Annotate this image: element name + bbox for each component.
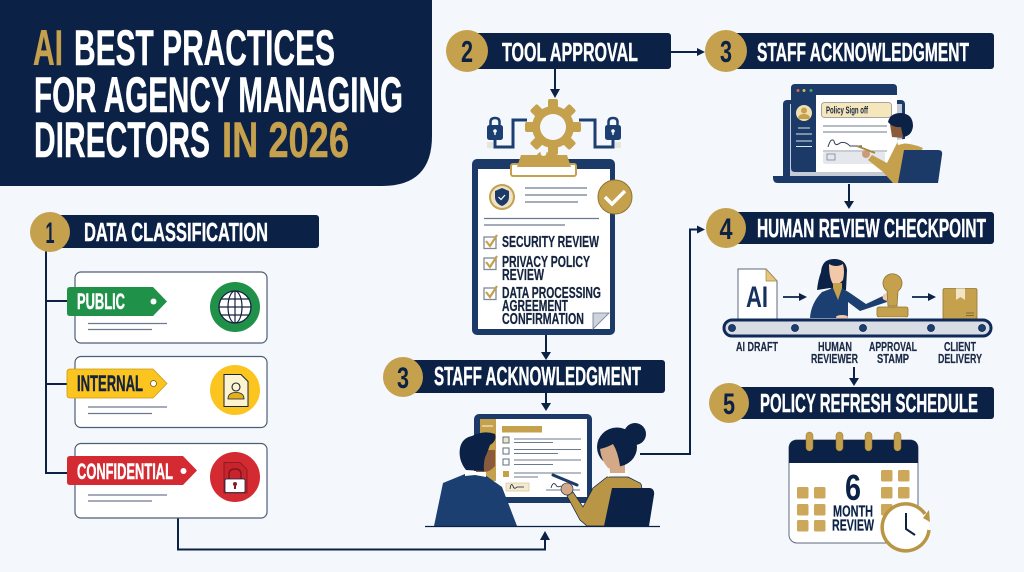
illustration: laptop policy sign off bbox=[773, 84, 942, 183]
conveyor labels: APPROVAL bbox=[869, 340, 917, 354]
icon: left padlock bbox=[487, 118, 503, 140]
heading: step 3 staff acknowledgment middle: 3 bbox=[397, 362, 409, 395]
heading: step 1 data classification: 1 bbox=[46, 217, 54, 250]
icon: document user bbox=[210, 365, 260, 415]
conveyor labels bbox=[736, 340, 982, 366]
panel: public bbox=[67, 272, 267, 343]
panel: internal bbox=[67, 356, 267, 428]
laptop chair bbox=[898, 150, 942, 183]
heading: step 3 staff acknowledgment middle bbox=[383, 357, 665, 397]
title: DIRECTORS bbox=[34, 112, 210, 168]
icon: gold check badge bbox=[598, 180, 632, 214]
heading: step 2 tool approval: 2 bbox=[461, 34, 473, 69]
checklist: DATA PROCESSING bbox=[502, 285, 601, 302]
heading: step 2 tool approval bbox=[446, 30, 671, 72]
heading: step 4 human review checkpoint bbox=[706, 208, 994, 248]
heading: step 5 policy refresh schedule bbox=[709, 383, 994, 423]
panel: clipboard bbox=[472, 150, 632, 335]
arrow: clipboard to staff acknowledgment bbox=[541, 335, 551, 360]
arrow: tool approval down bbox=[550, 69, 560, 98]
arrow: heading to signing scene bbox=[541, 393, 551, 411]
man from behind bbox=[434, 432, 517, 526]
checklist: REVIEW bbox=[502, 267, 544, 284]
icon: globe bbox=[210, 282, 260, 332]
tag: confidential: CONFIDENTIAL bbox=[77, 459, 173, 484]
icon: shield badge bbox=[489, 184, 515, 210]
conveyor belt bbox=[724, 320, 991, 336]
icon: delivery box bbox=[943, 288, 977, 319]
title: FOR AGENCY MANAGING bbox=[34, 67, 403, 123]
icon: AI document bbox=[738, 269, 777, 319]
icon: clip bbox=[511, 150, 576, 176]
icon: refresh clock bbox=[882, 504, 930, 551]
panel: confidential bbox=[67, 444, 267, 518]
checklist: AGREEMENT bbox=[502, 298, 568, 315]
conveyor labels: REVIEWER bbox=[811, 352, 858, 366]
arrow: conveyor to policy refresh bbox=[849, 367, 859, 386]
reviewer bbox=[810, 259, 890, 319]
conveyor labels: AI DRAFT bbox=[736, 340, 778, 354]
checklist: CONFIRMATION bbox=[502, 311, 584, 328]
tag: internal: INTERNAL bbox=[77, 371, 143, 396]
heading: step 3 staff acknowledgment middle: STAFF ACKNOWLEDGMENT bbox=[434, 361, 641, 391]
checklist bbox=[484, 234, 601, 328]
tag: internal bbox=[67, 369, 167, 398]
title bbox=[33, 20, 403, 168]
illustration: review conveyor bbox=[724, 259, 991, 366]
conveyor labels: DELIVERY bbox=[938, 352, 982, 366]
illustration: staff signing form bbox=[425, 414, 660, 526]
icon: approval stamp bbox=[877, 274, 908, 319]
policy sign off field bbox=[822, 102, 892, 118]
icon: six month review calendar bbox=[789, 432, 930, 551]
conveyor labels: STAMP bbox=[877, 352, 909, 366]
tag: confidential bbox=[67, 456, 197, 485]
heading: step 1 data classification: DATA CLASSIFICATION bbox=[84, 217, 268, 247]
heading: step 4 human review checkpoint: 4 bbox=[720, 213, 733, 246]
conveyor labels: CLIENT bbox=[944, 340, 976, 354]
icon: locked file bbox=[210, 452, 260, 502]
heading: step 2 tool approval: TOOL APPROVAL bbox=[502, 37, 638, 67]
policy sign off field: Policy Sign off bbox=[826, 106, 868, 116]
arrow: draft to reviewer bbox=[783, 293, 807, 301]
arrow: laptop to human review bbox=[844, 184, 854, 209]
title: IN 2026 bbox=[222, 112, 349, 168]
icon: six month review calendar: 6 bbox=[845, 467, 861, 508]
icon: six month review calendar: MONTH bbox=[833, 504, 873, 520]
page fold bbox=[593, 313, 609, 329]
icon: AI document: AI bbox=[746, 281, 768, 314]
arrow: tool approval to staff acknowledgment bbox=[671, 48, 705, 56]
checklist: SECURITY REVIEW bbox=[502, 234, 599, 251]
title: AI bbox=[33, 20, 63, 76]
arrow: stamp to delivery bbox=[912, 293, 936, 301]
heading: step 3 staff acknowledgment top: 3 bbox=[720, 34, 732, 69]
connector: classification to staff acknowledgment bbox=[178, 518, 550, 550]
connector: signing scene to human review bbox=[640, 226, 705, 454]
conveyor labels: HUMAN bbox=[818, 340, 852, 354]
icon: gear with locks bbox=[487, 99, 621, 155]
heading: step 5 policy refresh schedule: 5 bbox=[723, 388, 735, 421]
checklist: PRIVACY POLICY bbox=[502, 254, 590, 271]
heading: step 3 staff acknowledgment top bbox=[705, 30, 994, 72]
user avatar bbox=[796, 105, 812, 121]
icon: right padlock bbox=[605, 118, 621, 140]
chair bbox=[604, 488, 654, 526]
connector: classification tree bbox=[46, 250, 68, 473]
heading: step 1 data classification bbox=[30, 212, 319, 252]
title: BEST PRACTICES bbox=[74, 20, 335, 76]
tag: public: PUBLIC bbox=[77, 289, 125, 314]
title panel bbox=[0, 0, 432, 186]
seated person bbox=[857, 113, 923, 183]
icon: six month review calendar: REVIEW bbox=[832, 518, 875, 534]
woman from behind bbox=[553, 423, 646, 526]
